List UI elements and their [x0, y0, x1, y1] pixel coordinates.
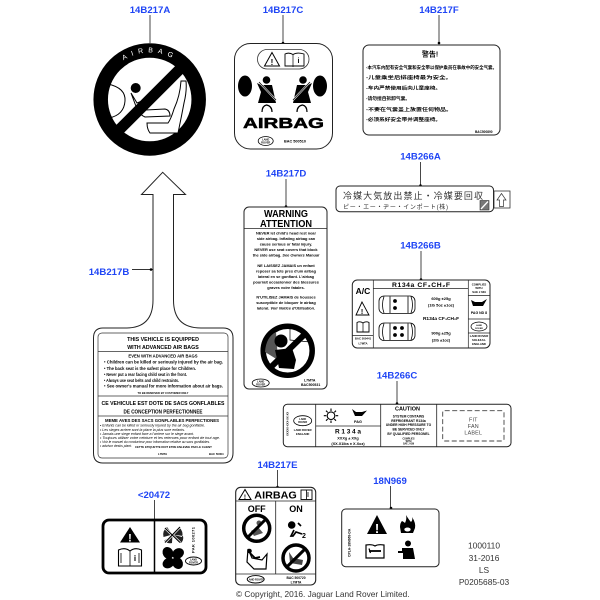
heading: 警告!	[422, 50, 438, 58]
part code: BAC500531	[301, 383, 320, 387]
label: Japanese refrigerant notice	[336, 186, 494, 212]
caution text: COMPLIES	[402, 438, 415, 440]
part label and leader: 14B266A	[400, 152, 441, 187]
English heading	[127, 337, 199, 351]
French warning text: lateral. Voir Notice d'Utilisation.	[257, 306, 315, 310]
serviceman icon	[398, 540, 415, 559]
French removal notice and code: L7MTA	[158, 452, 167, 456]
flame icon	[400, 515, 415, 533]
A/C column: L7MTA	[358, 342, 368, 346]
label: caution refrigerant system	[283, 404, 511, 447]
warning lines: -必须系好安全带并调整座椅。	[366, 116, 441, 123]
child head	[131, 83, 141, 93]
charge weights: 900g ±25g	[431, 330, 451, 336]
maker column	[286, 412, 312, 436]
inner rounded frame	[98, 333, 228, 458]
part label and leader: 14B217C	[263, 5, 303, 44]
diagram reference text: P0205685-03	[459, 577, 509, 587]
English warning text: NEVER use seat covers that block	[254, 247, 318, 252]
steering wheel arc	[108, 84, 125, 118]
caution text: SAE J 639	[403, 442, 415, 446]
French bullet list: • Toujours utiliser votre ceinture et les retenues pour enfant de tout age.	[100, 436, 220, 440]
charge weights: (1lb 5oz ±1oz)	[428, 302, 455, 308]
warning lines: -本汽车内配有安全气囊和安全带以保护乘员在事故中的安全气囊。	[366, 64, 497, 71]
French warning text: pourrait occasionner des blessures	[253, 280, 319, 284]
R134a charge: R134a	[335, 428, 361, 436]
hatched box	[480, 200, 489, 210]
right airbag oval	[313, 76, 327, 96]
warning and manual pill	[258, 50, 309, 69]
part label and leader: 14B266B	[400, 240, 441, 281]
brand oval logo: LAND	[190, 558, 197, 562]
warning lines: -不要在气囊盖上放置任何物品。	[366, 106, 452, 113]
heading: WARNING	[264, 209, 308, 220]
caution text: REFRIGERANT R134a	[391, 419, 426, 423]
compliance column: LAND	[476, 324, 482, 327]
French bullet list: • Voir le manuel du conducteur pour information relative au sacs gonflables.	[100, 440, 210, 444]
header: R134a CF₃CH₂F	[392, 282, 450, 289]
label: airbag seatbelt	[234, 44, 332, 149]
heading	[260, 209, 312, 230]
caution text: BE SERVICED ONLY	[392, 428, 425, 432]
English warning text: cause serious or fatal injury.	[260, 242, 312, 246]
compliance column: PAG ND 8	[471, 311, 487, 315]
part label and leader: 14B217A: 14B217A	[130, 5, 170, 16]
part code: PAK 100271	[190, 526, 196, 553]
part label and leader: <20472	[138, 490, 170, 519]
part label and leader: 18N969	[373, 476, 407, 509]
part label and leader: 14B217A	[130, 5, 170, 43]
manual icon: i	[134, 554, 136, 563]
child prohibition icon	[263, 324, 312, 375]
fit fan label dashed box: FIT	[469, 418, 478, 424]
left belted figure	[257, 76, 276, 112]
ring text: AIRBAG	[123, 48, 173, 60]
English bullet list: • The back seat is the safest place for Children.	[104, 366, 196, 371]
part code: CPLA-18N969-DA	[348, 528, 352, 557]
French warning text: N'UTILISEZ JAMAIS de housses	[256, 294, 316, 300]
part label: 14B217B with leader	[89, 267, 153, 278]
maker column: ENGLAND	[296, 432, 309, 436]
front arrow box	[494, 191, 510, 208]
caution text: UNDER HIGH PRESSURE TO	[386, 423, 432, 427]
fan	[160, 545, 186, 571]
ON occupant airbag icon: 2	[302, 533, 306, 540]
brand oval logo	[186, 557, 202, 565]
fit fan label dashed box	[443, 411, 504, 441]
part label and leader: 14B217F	[419, 5, 459, 44]
part label and leader: 14B266A: 14B266A	[400, 152, 441, 162]
warning triangle: !	[244, 494, 246, 501]
OFF and ON headings: ON	[289, 504, 303, 514]
label: airbag off on	[236, 487, 316, 585]
charge weights	[423, 296, 459, 342]
part label and leader: 14B217E	[257, 460, 298, 488]
caution text: BY QUALIFIED PERSONEL	[387, 432, 430, 436]
oil can and PAG: PAG	[354, 420, 362, 424]
child in seat icon	[247, 549, 267, 569]
French warning text: reposer sa tete pres d'um airbag	[256, 268, 317, 274]
part label and leader: 18N969: 18N969	[373, 476, 407, 487]
label: service warning pictograms	[342, 509, 439, 567]
English heading: THIS VEHICLE IS EQUIPPED	[127, 337, 199, 343]
French removal notice and code: CETTE ETIQUETTE DOIT ETRE ENLEVEE PAR LE CLIENT	[135, 445, 212, 449]
copyright line: © Copyright, 2016. Jaguar Land Rover Limited.	[236, 589, 410, 599]
French warning text	[253, 263, 319, 310]
French bullet list: • Enfants can be killed or seriously injured by the air bag gonflable.	[100, 424, 205, 428]
warning lines: -请勿擅自拆卸气囊。	[366, 95, 410, 102]
oil can and PAG	[352, 409, 367, 424]
label: R134a refrigerant charge	[352, 280, 490, 348]
French warning text: NE LAISSEZ JAMAIS un enfant	[257, 263, 315, 268]
part label and leader: 14B217D	[266, 168, 306, 208]
brand oval logo: LAND	[262, 138, 269, 142]
manual icon	[301, 490, 312, 500]
English bullet list: EVEN WITH ADVANCED AIR BAGS	[128, 354, 198, 358]
child body	[131, 93, 170, 117]
English heading: WITH ADVANCED AIR BAGS	[127, 345, 199, 351]
French warning text: susceptible de bloquer le airbag	[256, 300, 316, 305]
part label and leader: 14B217C: 14B217C	[263, 5, 303, 16]
French warning text: lateral en se gonflant. L'airbag	[258, 274, 315, 279]
main Japanese line: 冷媒大気放出禁止・冷媒要回収	[343, 190, 483, 201]
part label and leader: 14B266C	[377, 370, 417, 405]
French heading: CE VEHICULE EST DOTE DE SACS GONFLABLES	[102, 401, 225, 407]
maker column: ROVER	[298, 421, 307, 424]
heading: ATTENTION	[260, 219, 312, 230]
charge weights: 600g ±25g	[431, 296, 451, 301]
part label and leader: 14B217F: 14B217F	[419, 5, 459, 16]
compliance column: SAE J 639	[472, 290, 486, 294]
warning and manual pill: i	[298, 58, 300, 65]
French bullet list: • Les sieges arriere sont la place la plus sure enfants.	[100, 428, 185, 432]
diagram reference text: 1000110	[468, 540, 500, 550]
caution text: WITH	[406, 441, 412, 443]
compliance column: ROVER	[475, 328, 483, 330]
part code	[286, 576, 306, 584]
part label and leader: 14B217E: 14B217E	[257, 460, 298, 471]
seat outline	[147, 81, 186, 133]
compliance column: COMPLIES	[472, 282, 486, 286]
charge weights: R134a CF₃CH₂F	[423, 316, 459, 322]
label: fan warning	[103, 519, 206, 573]
maker column: LAND ROVER	[294, 428, 312, 432]
English bullet list: • Always use seat belts and child restraints.	[104, 378, 179, 383]
French bullet list: • advisor desks plant.	[100, 444, 132, 448]
warning lines: -车内严禁使用后向儿童座椅。	[366, 84, 441, 92]
brand oval logo: ROVER	[189, 562, 198, 564]
part code: L7MTA	[291, 580, 302, 584]
part code: BAC 500720	[286, 576, 306, 580]
prohibition slash	[115, 65, 184, 134]
brand oval logo: ROVER	[261, 140, 270, 144]
part code	[301, 378, 320, 387]
car top view, quad charge	[379, 323, 415, 340]
caution text	[386, 406, 432, 446]
maker column: LAND	[299, 418, 306, 421]
caution text: SYSTEM CONTAINS	[393, 414, 425, 418]
English bullet list	[104, 354, 223, 395]
car top view, front dual charge	[379, 296, 415, 314]
French bullet list: • Jamais une siege enfant face a l'arriere sur le siege avant.	[100, 432, 194, 436]
English warning text: NEVER let child's head rest near	[256, 230, 316, 236]
left airbag oval	[238, 76, 252, 96]
warning lines	[366, 64, 497, 123]
English bullet list: • See owner's manual for more information about air bags.	[104, 384, 223, 388]
English warning text	[253, 230, 320, 258]
warning triangle: !	[375, 521, 379, 536]
part code: BAC 500510	[284, 140, 306, 144]
French removal notice and code	[135, 445, 224, 456]
French removal notice and code: BAC 50004	[209, 452, 224, 456]
label: warning attention side airbag	[244, 207, 327, 389]
R134a charge: (XX.X1lbs ± X.Xoz)	[331, 442, 365, 446]
sun symbol	[324, 408, 338, 423]
fit fan label dashed box: LABEL	[464, 430, 482, 436]
R134a charge	[331, 428, 365, 446]
English warning text: the side airbag. See Owners Manual	[253, 252, 320, 258]
French bullet list	[100, 418, 220, 448]
French bullet list: MEME AVES DES SACS GONFLABLES PERFECTIONES	[105, 418, 219, 423]
compliance column: WITH	[475, 286, 483, 290]
diagram reference text: 31-2016	[469, 553, 500, 563]
English bullet list: TO BE REMOVED BY CUSTOMER ONLY	[138, 391, 189, 395]
label: Chinese airbag warning	[363, 45, 500, 135]
ON prohibition circle	[283, 545, 309, 571]
label: advanced air bags hang tag with arrow	[94, 172, 233, 463]
part code: BAC500890	[475, 130, 493, 134]
English bullet list: • Children can be killed or seriously injured by the air bag.	[104, 360, 223, 364]
caution text: CAUTION	[395, 406, 420, 412]
OFF and ON headings: OFF	[248, 504, 266, 514]
English bullet list: • Never put a rear facing child seat in the front.	[104, 372, 187, 377]
AIRBAG header: AIRBAG	[254, 489, 297, 501]
charge weights: (2lb ±1oz)	[432, 338, 451, 342]
maker column: XXXXX-XXX-XX-XX	[286, 412, 290, 436]
brand oval logo: LAND ROVER	[247, 577, 264, 581]
crossed fan	[163, 527, 183, 543]
right belted figure	[293, 76, 312, 112]
compliance column: LAND ROVER	[470, 334, 488, 338]
manual with wrench icon	[366, 545, 384, 558]
label: no child seat airbag prohibition disc	[93, 43, 206, 156]
A/C column: A/C	[356, 286, 370, 296]
OFF and ON headings	[248, 504, 303, 514]
diagram reference text	[459, 540, 509, 587]
compliance column: ENGLAND	[472, 342, 486, 346]
OFF prohibition circle	[244, 515, 270, 541]
importer line: ピー・エー・ヂー・インポート(株)	[343, 203, 448, 211]
part label and leader: <20472: <20472	[138, 490, 170, 501]
French heading	[102, 401, 225, 416]
part code: L7MTA	[304, 378, 316, 382]
A/C column: !	[361, 309, 363, 316]
diagram reference text: LS	[479, 565, 490, 575]
R134a charge: XXXg ± XXg	[337, 436, 359, 440]
part label: 14B217B with leader: 14B217B	[89, 267, 129, 278]
part label and leader: 14B266C: 14B266C	[377, 370, 417, 382]
A/C column	[355, 286, 372, 346]
AIRBAG wordmark: AIRBAG	[243, 115, 324, 132]
brand oval logo: LAND	[257, 380, 264, 384]
warning and manual pill: !	[271, 58, 273, 67]
brand oval logo: ROVER	[256, 382, 265, 386]
warning lines: -儿童乘坐后排座椅最为安全。	[366, 74, 452, 81]
brand oval logo	[252, 379, 269, 387]
part label and leader: 14B266B: 14B266B	[400, 240, 441, 252]
compliance column	[470, 282, 488, 346]
part label and leader: 14B217D: 14B217D	[266, 168, 306, 180]
French warning text: graves voire fatales.	[267, 285, 305, 290]
A/C column: BAC 500441	[355, 336, 372, 340]
French heading: DE CONCEPTION PERFECTIONNEE	[124, 410, 203, 416]
brand oval logo	[258, 136, 273, 146]
fit fan label dashed box: FAN	[468, 424, 479, 430]
compliance column: SOLIHULL	[472, 338, 486, 342]
warning triangle: !	[128, 532, 132, 544]
English warning text: side airbag. Inflating airbag can	[257, 236, 316, 241]
